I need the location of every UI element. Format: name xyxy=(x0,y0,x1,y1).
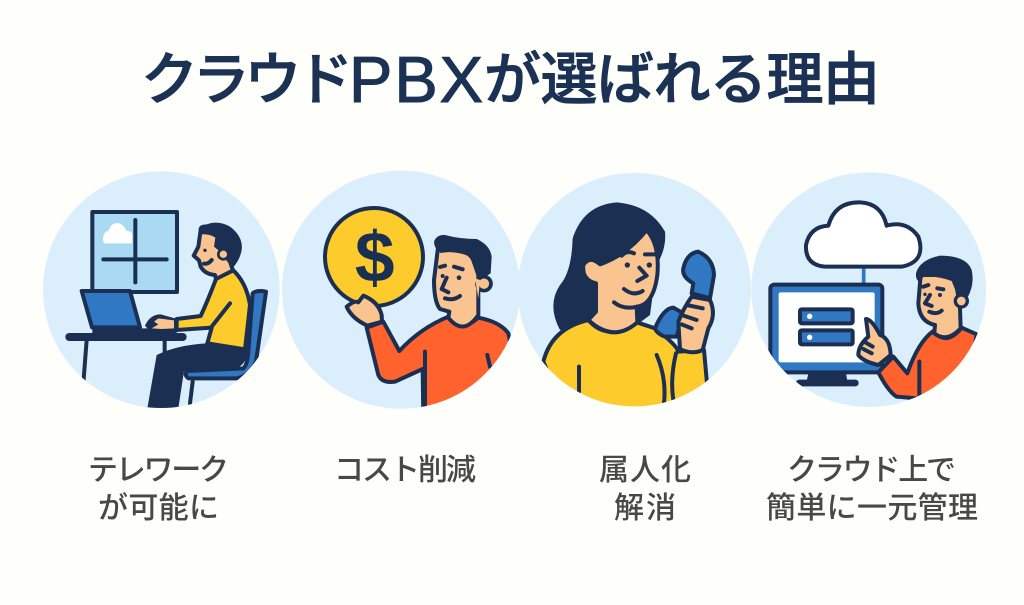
label: telework xyxy=(88,445,229,527)
pointing hand xyxy=(858,319,891,365)
icon: phone handset xyxy=(655,252,714,337)
hand xyxy=(145,314,175,329)
icon: person holding coin xyxy=(282,171,527,418)
icon: desk xyxy=(69,328,183,383)
title xyxy=(141,34,880,116)
sweater xyxy=(542,322,709,406)
icon: monitor xyxy=(770,285,882,383)
title: クラウド xyxy=(141,34,353,116)
trousers xyxy=(147,343,247,408)
icon: woman on telephone xyxy=(518,173,751,418)
label: removing dependence on individuals xyxy=(599,445,691,527)
hand xyxy=(347,296,382,326)
icon: dollar coin xyxy=(325,208,423,306)
head xyxy=(194,230,233,282)
head xyxy=(434,245,478,327)
face details xyxy=(923,285,943,313)
face and neck xyxy=(583,230,658,332)
icon: telework person at desk xyxy=(43,171,280,408)
icon: chair xyxy=(186,291,266,403)
icon: dollar coin: $ xyxy=(355,218,394,298)
label: removing dependence on individuals: 解消 xyxy=(614,483,676,527)
label: cost reduction: コスト削減 xyxy=(334,445,476,489)
title: PBX xyxy=(349,43,483,116)
panel: telework and cost illustrations xyxy=(43,171,527,418)
label: central management xyxy=(766,445,978,527)
cloud and connector xyxy=(806,202,920,284)
hair xyxy=(553,202,665,330)
icon: person with monitor and cloud xyxy=(751,172,986,407)
label: central management: 簡単に一元管理 xyxy=(766,483,978,527)
title: が選ばれる理由 xyxy=(484,34,880,116)
server rows xyxy=(800,309,853,344)
label: telework: が可能に xyxy=(98,483,219,527)
label: central management: クラウド上で xyxy=(787,445,956,489)
head xyxy=(918,275,961,337)
sweater xyxy=(364,315,511,407)
hand holding phone xyxy=(678,297,713,352)
icon: window with cloud xyxy=(92,212,177,292)
sweater xyxy=(878,328,977,398)
label: removing dependence on individuals: 属人化 xyxy=(599,445,691,489)
label: telework: テレワーク xyxy=(88,445,229,489)
torso and arm xyxy=(177,270,250,349)
icon: laptop xyxy=(82,291,140,327)
face details xyxy=(440,266,463,299)
panel: handover and cloud management illustrations xyxy=(518,172,986,418)
